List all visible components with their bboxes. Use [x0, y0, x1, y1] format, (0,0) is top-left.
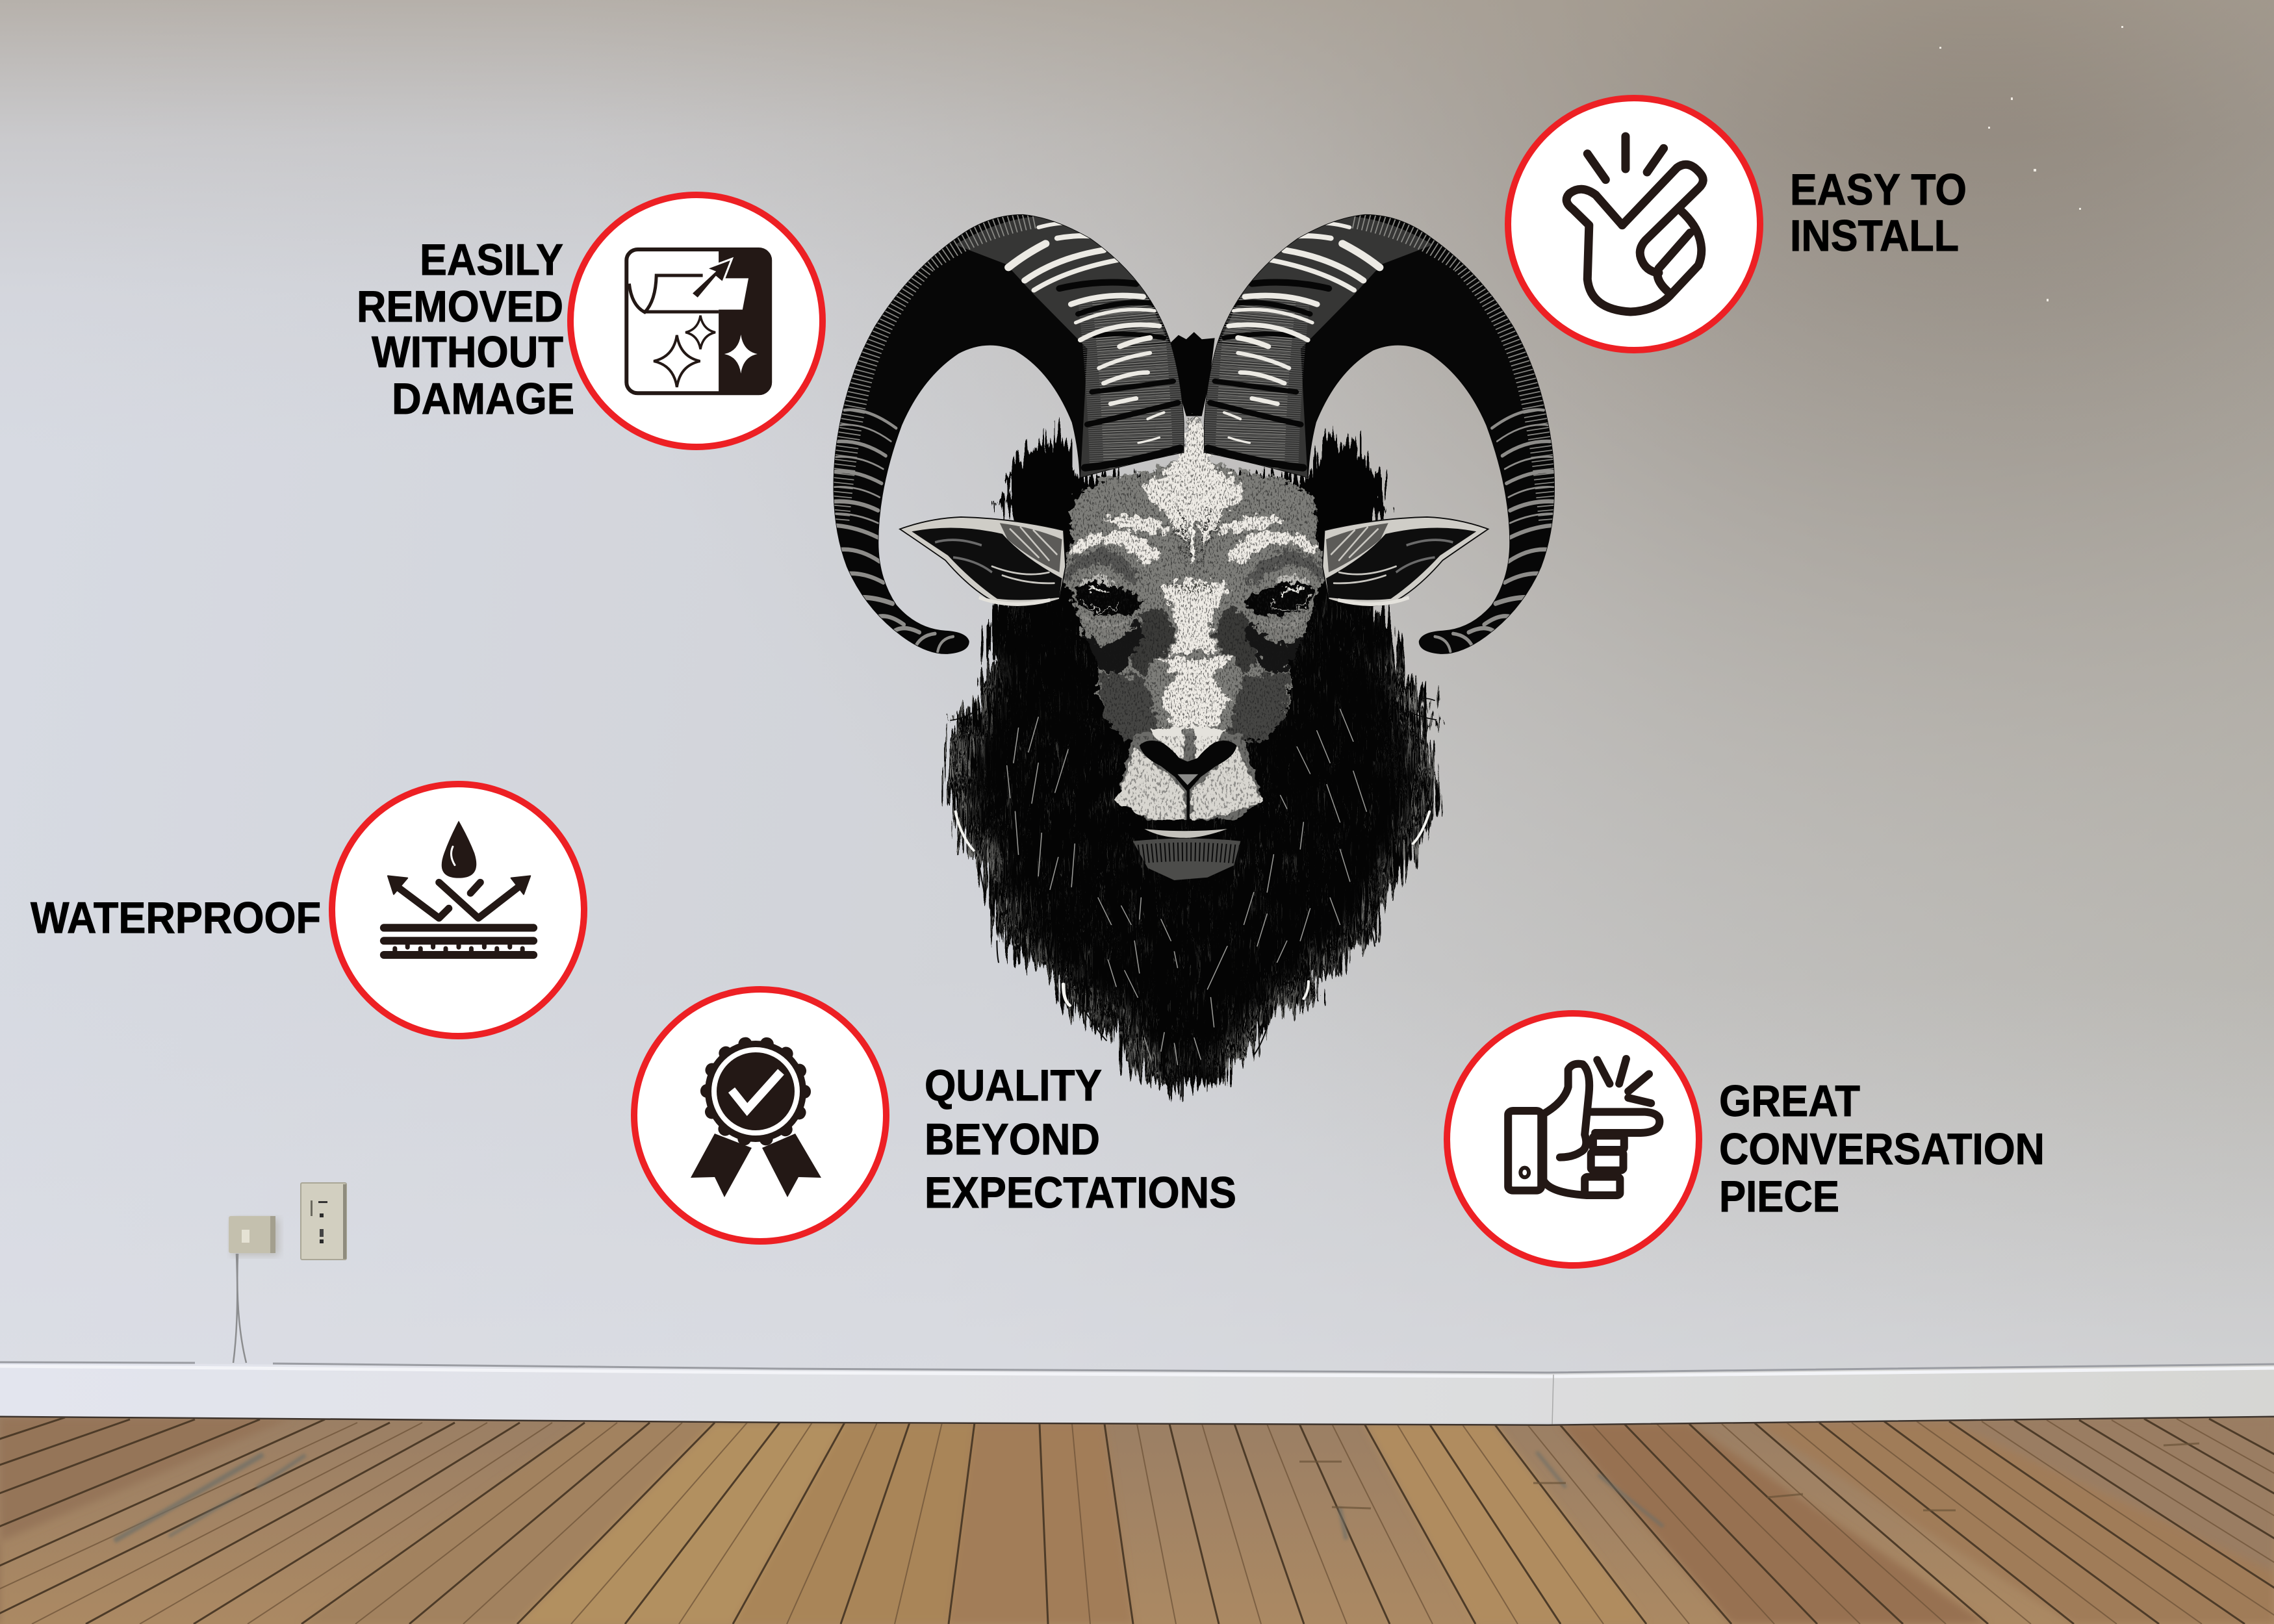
red ring [1508, 98, 1760, 350]
right ear [1322, 517, 1488, 606]
label: REMOVED [357, 282, 563, 331]
label [925, 1061, 1236, 1217]
beard strands [1007, 709, 1366, 1065]
right horn [1201, 215, 1554, 653]
label: INSTALL [1790, 211, 1959, 260]
white edge strands [956, 811, 1429, 1006]
icon: peeling wall sticker [626, 249, 771, 394]
icon: thumbs up pointing hand [1508, 1059, 1659, 1195]
badge: easy to install [1508, 98, 1967, 350]
badge: waterproof [31, 784, 584, 1036]
stray hair wisps [951, 698, 1436, 1056]
badge: great conversation piece [1447, 1013, 2045, 1265]
baseboard [0, 1362, 2274, 1426]
label: DAMAGE [392, 374, 574, 424]
face [1061, 416, 1327, 741]
mane and tuft [935, 332, 1448, 1101]
label [357, 235, 574, 424]
label [1790, 165, 1967, 260]
horns and ears [834, 215, 1554, 653]
label: EASILY [420, 235, 563, 285]
label: BEYOND [925, 1115, 1100, 1164]
label: PIECE [1719, 1172, 1839, 1221]
left ear [900, 517, 1066, 606]
power cord [233, 1254, 246, 1363]
icon: water drop on membrane [384, 820, 533, 955]
wood floor [0, 1417, 2274, 1624]
label: GREAT [1719, 1076, 1860, 1126]
red ring [1447, 1013, 1699, 1265]
muzzle and beard detail [951, 698, 1436, 1065]
label: QUALITY [925, 1061, 1102, 1110]
wall switch plate [229, 1216, 279, 1255]
red ring [634, 989, 886, 1241]
ram head wall decal [834, 215, 1554, 1101]
icon: finger snap [1566, 136, 1703, 312]
icon: award rosette [691, 1041, 821, 1197]
label: WATERPROOF [31, 893, 321, 943]
tuft between the horns [1169, 332, 1215, 416]
badge: easily removed without damage [357, 195, 823, 447]
label: EASY TO [1790, 165, 1967, 214]
red ring [570, 195, 823, 447]
snout [1115, 726, 1262, 820]
lip [1144, 829, 1227, 838]
label: CONVERSATION [1719, 1124, 2045, 1174]
badge: quality beyond expectations [634, 989, 1236, 1241]
nose [1140, 741, 1236, 792]
power outlet [301, 1183, 346, 1260]
chin hair [1133, 839, 1240, 880]
red ring [332, 784, 584, 1036]
mane [935, 425, 1448, 1101]
label [1719, 1076, 2045, 1221]
label: WITHOUT [372, 327, 563, 377]
left horn [834, 215, 1187, 653]
label: EXPECTATIONS [925, 1168, 1236, 1217]
